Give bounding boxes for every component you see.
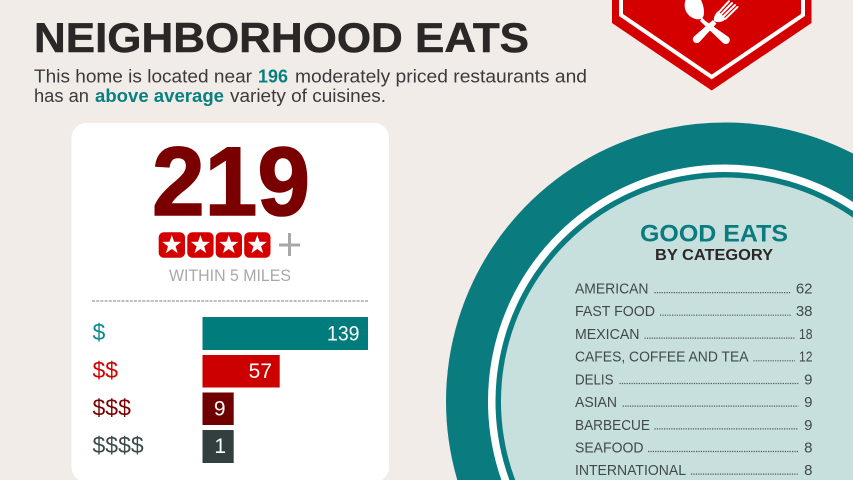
distance caption: WITHIN 5 MILES <box>169 267 291 285</box>
row: seafood: SEAFOOD <box>575 439 644 456</box>
row: delis: 9 <box>804 371 812 388</box>
row: american <box>575 280 812 298</box>
bar: $$$ <box>92 392 234 425</box>
row: international <box>575 462 812 479</box>
panel: good eats plate <box>446 122 853 480</box>
big number: 219 <box>152 127 310 236</box>
row: mexican: MEXICAN <box>575 326 640 343</box>
row: barbecue <box>575 417 812 434</box>
row: fast food <box>575 303 812 320</box>
row: asian <box>575 394 812 411</box>
intro text: has an <box>34 86 89 106</box>
row: mexican <box>575 326 812 343</box>
row: barbecue: BARBECUE <box>575 417 650 434</box>
badge: restaurant shield <box>612 0 812 90</box>
bar: $$ <box>92 355 280 388</box>
bar: $$: 57 <box>249 360 272 383</box>
row: fast food: FAST FOOD <box>575 303 655 320</box>
title: NEIGHBORHOOD EATS <box>34 14 529 61</box>
bar: $$$$: $$$$ <box>92 432 144 458</box>
row: delis <box>575 371 812 388</box>
row: barbecue: 9 <box>804 417 812 434</box>
row: cafes, coffee and tea: CAFES, COFFEE AND TEA <box>575 349 748 366</box>
category list <box>575 280 812 479</box>
row: american: 62 <box>796 280 812 298</box>
row: asian: ASIAN <box>575 394 617 411</box>
subheading: by category: BY CATEGORY <box>655 247 773 264</box>
row: seafood: 8 <box>804 439 812 456</box>
bar: $: 139 <box>327 322 360 346</box>
heading: good eats: GOOD EATS <box>640 220 788 248</box>
bar: $$$: $$$ <box>92 394 131 420</box>
bar: $$$$ <box>92 430 234 463</box>
intro text <box>34 66 587 106</box>
intro text: 196 <box>258 66 288 86</box>
row: delis: DELIS <box>575 371 614 388</box>
bar: $$$: 9 <box>214 398 226 420</box>
bar: $: $ <box>92 319 106 345</box>
icon: four star rating plus <box>159 232 300 258</box>
row: international: INTERNATIONAL <box>575 462 686 479</box>
intro text: variety of cuisines. <box>230 86 386 106</box>
row: seafood <box>575 439 812 456</box>
row: mexican: 18 <box>799 326 812 343</box>
panel: restaurant count card <box>72 123 389 480</box>
bar: $ <box>92 317 368 350</box>
intro text: above average <box>95 86 224 106</box>
row: cafes, coffee and tea: 12 <box>799 349 812 366</box>
bar: $$$$: 1 <box>214 435 226 458</box>
bar chart: restaurants by price <box>92 317 368 463</box>
row: asian: 9 <box>804 394 812 411</box>
row: fast food: 38 <box>796 303 812 320</box>
icon: crossed spoon and fork <box>685 0 738 44</box>
intro text: This home is located near <box>34 66 252 86</box>
row: american: AMERICAN <box>575 280 648 298</box>
bar: $$: $$ <box>92 357 118 383</box>
intro text: moderately priced restaurants and <box>295 66 587 86</box>
row: international: 8 <box>804 462 812 479</box>
